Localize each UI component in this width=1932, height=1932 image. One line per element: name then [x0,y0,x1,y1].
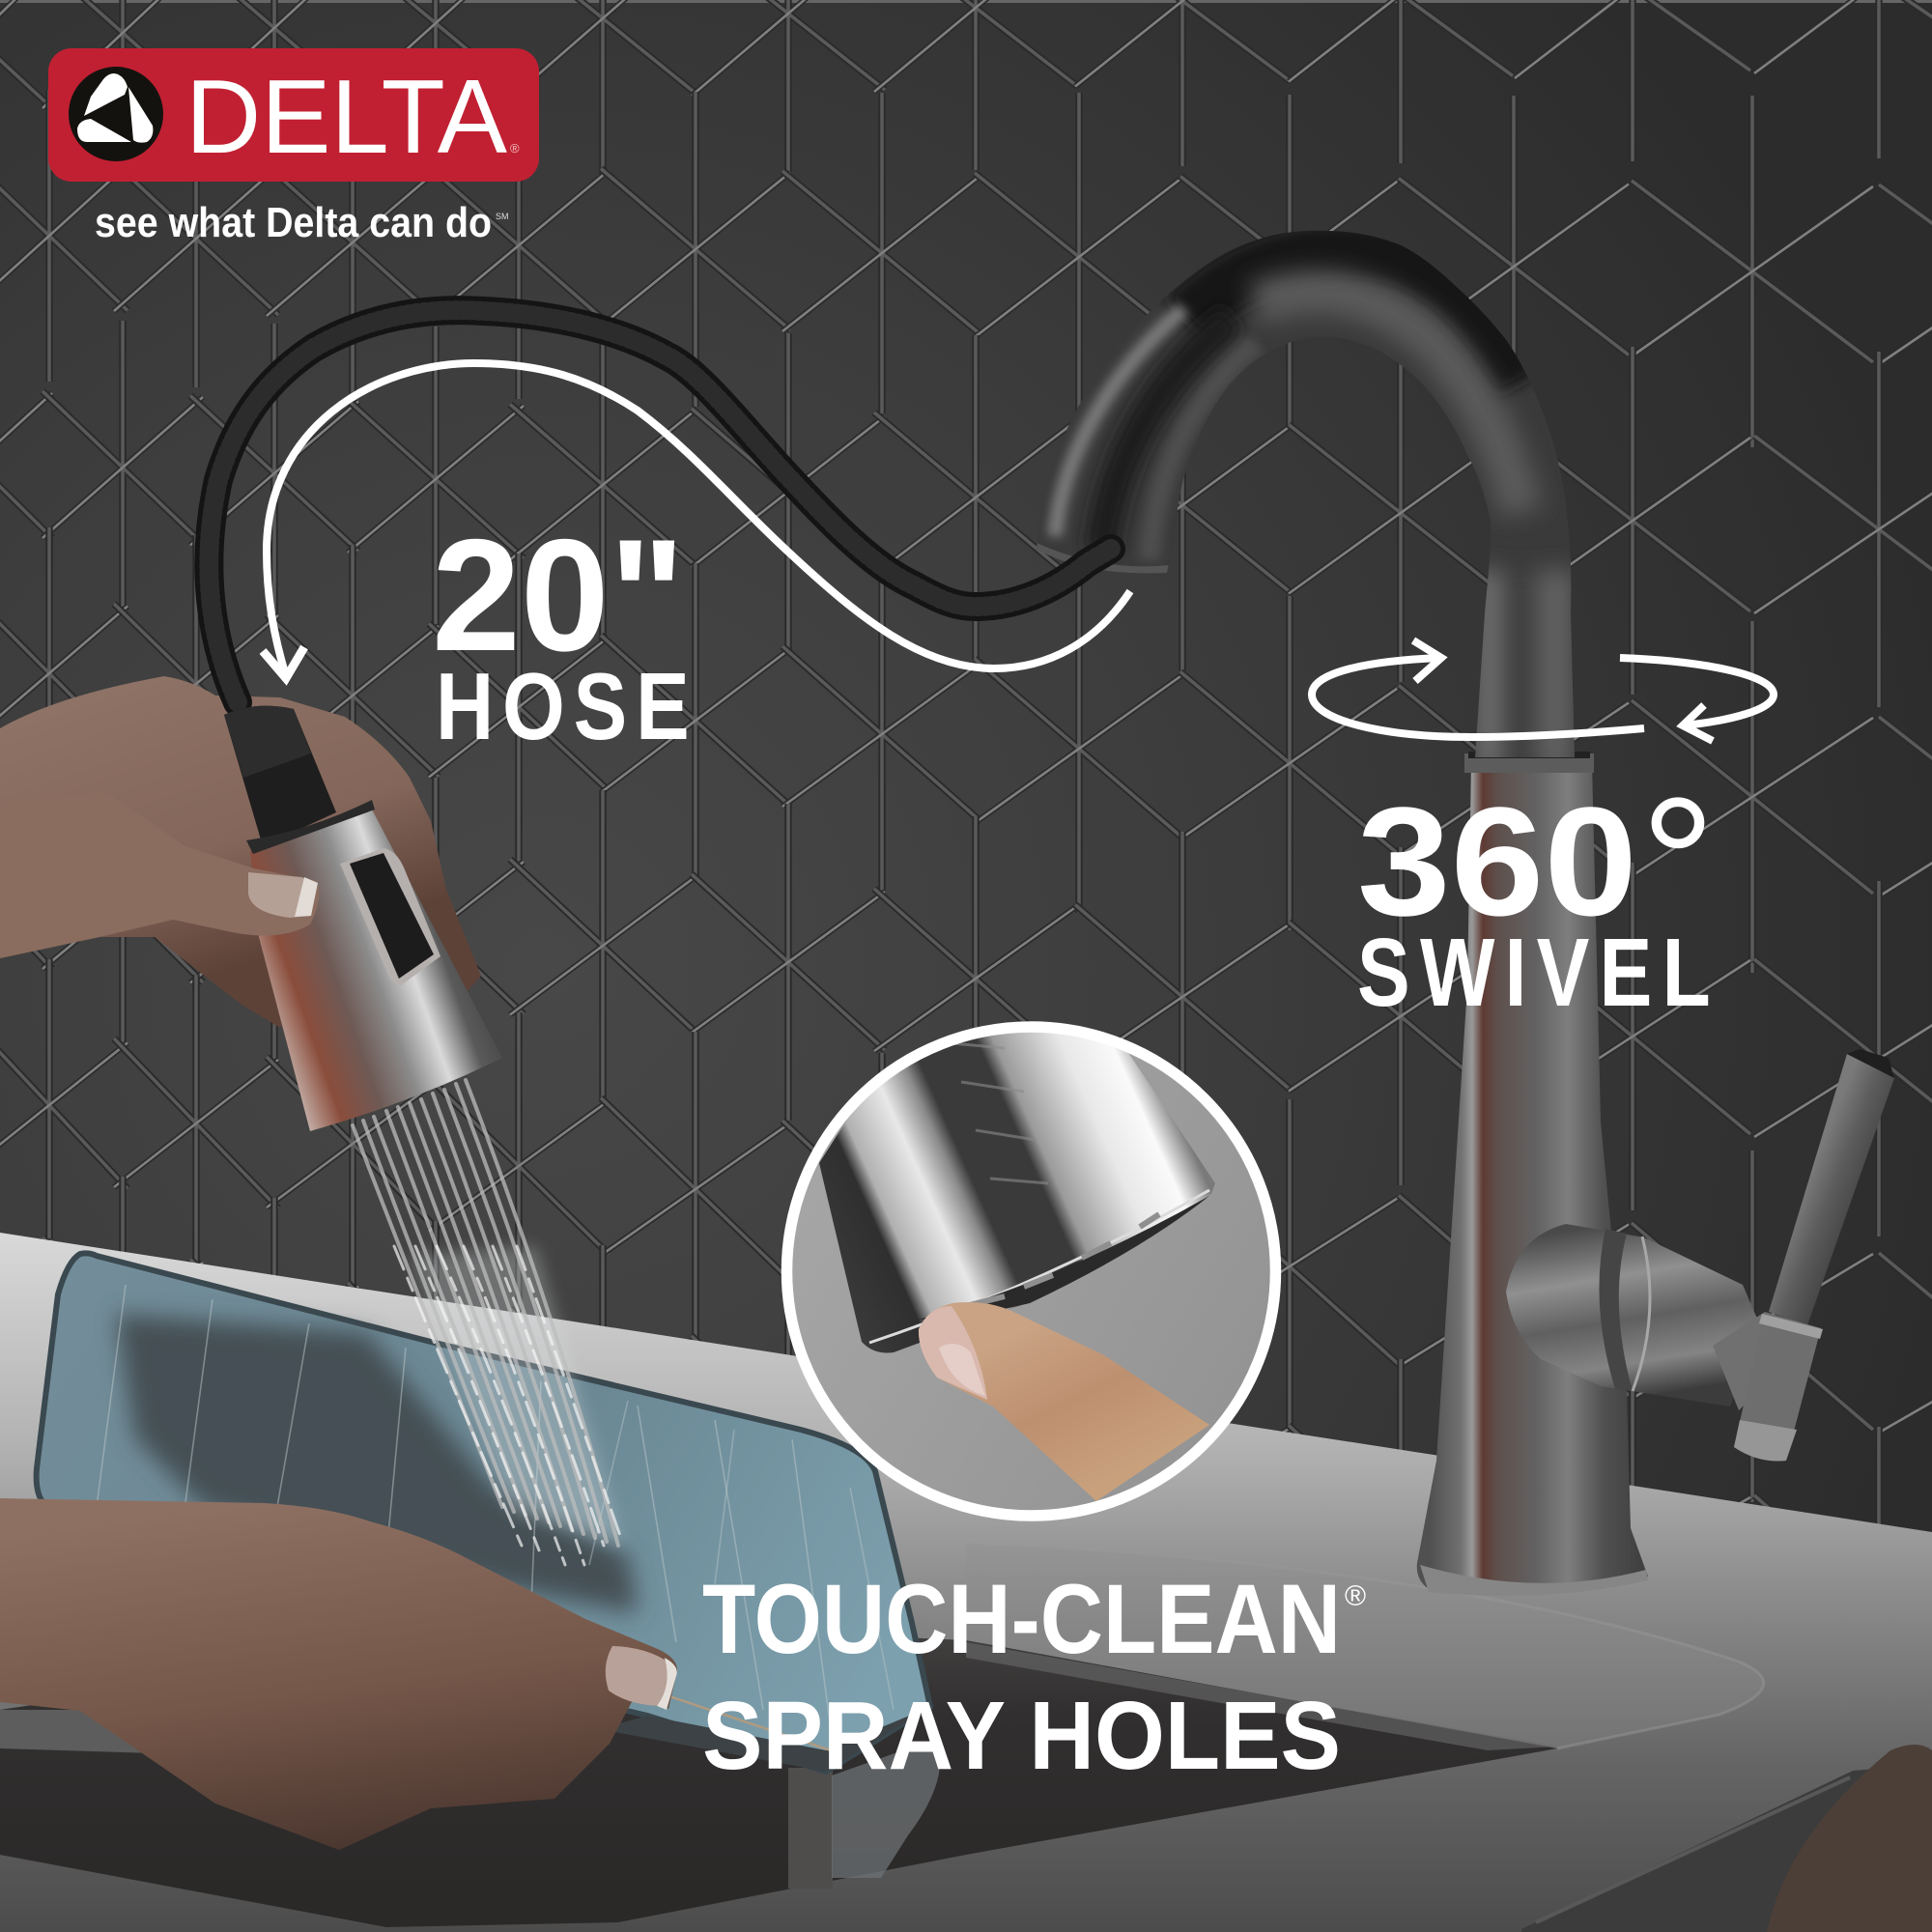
label: touch-clean spray holes: ® [1345,1580,1366,1612]
pull-down sprayer [224,706,502,1131]
water runoff below dish [832,1739,940,1878]
label: touch-clean spray holes: SPRAY HOLES [702,1682,1341,1790]
label: 20 inch hose [432,506,690,760]
label: touch-clean spray holes: TOUCH-CLEAN [702,1564,1341,1674]
label: 360 degree swivel: ° [1640,760,1716,965]
lever hub [1506,1224,1777,1410]
lever handle [1734,1049,1894,1461]
label: 360 degree swivel: 360 [1357,775,1637,948]
water spray stream [353,1080,623,1565]
logo: Delta [48,48,539,182]
label: 20 inch hose: 20" [432,506,685,684]
plate and toast at bottom right [1521,1745,1932,1932]
spray button [340,848,440,985]
spray-head closeup [819,1032,1215,1352]
logo red badge [48,48,539,182]
label: 20 inch hose: HOSE [436,655,690,760]
arrow: swivel rotation [1312,640,1774,741]
braided black hose [209,310,1111,702]
label: touch-clean spray holes [702,1564,1366,1790]
fingertip [919,1302,1209,1501]
upper hand back fingers [0,676,481,1028]
lower hand holding dish [0,1498,677,1850]
sprayer collar [224,706,375,854]
arrow: hose length curve [263,363,1130,678]
icon: Delta triangle mark [69,67,163,161]
logo wordmark: DELTA [185,58,507,176]
thumb of upper hand [0,792,319,958]
spout arch with shading [1024,222,1584,773]
tagline: SM [496,212,508,221]
kitchen faucet body [1024,222,1894,1596]
sprayer head [250,808,502,1131]
panel: countertop [0,1233,1932,1932]
tagline: see what Delta can do [95,199,492,246]
label: 360 degree swivel [1357,760,1716,1027]
panel: dark sink basin [0,1623,1557,1927]
blue ceramic dish [37,1253,930,1772]
label: 360 degree swivel: SWIVEL [1357,919,1711,1027]
logo registered mark: ® [510,141,520,156]
faucet base [1417,752,1648,1596]
callout: touch-clean circle inset [786,995,1275,1516]
